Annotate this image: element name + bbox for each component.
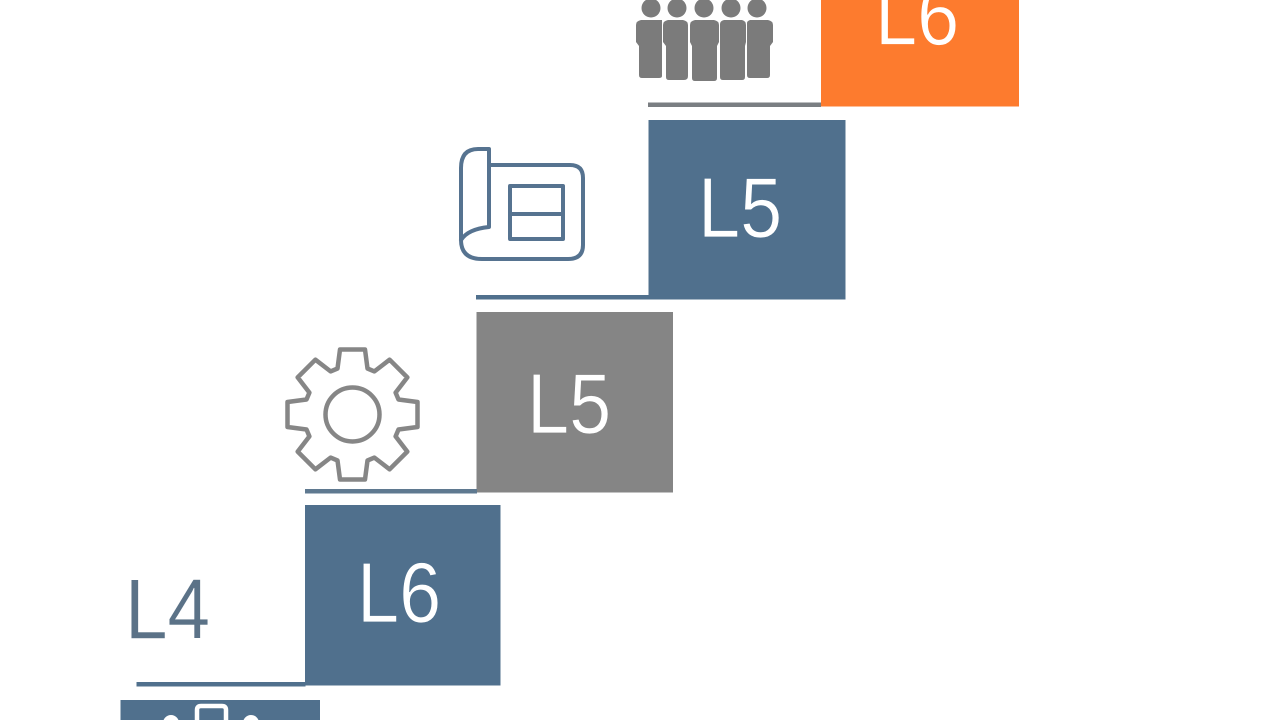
step: blue L6: L6 xyxy=(357,546,441,641)
step: blue L5: L5 xyxy=(698,161,782,256)
icon: gear xyxy=(288,350,418,480)
icon: blueprint xyxy=(461,149,583,259)
icon: partial white symbol xyxy=(163,706,259,720)
step: gray L5 xyxy=(476,312,673,492)
tread line: blue gray xyxy=(305,489,477,494)
step: blue L5 xyxy=(648,120,846,300)
tread line: blue xyxy=(476,295,649,300)
tread line: upper gray xyxy=(648,102,821,107)
step: bottom blue with partial icon xyxy=(120,700,320,720)
step: orange L6 xyxy=(821,0,1019,107)
tread line: lowest xyxy=(136,682,306,686)
step: blue L6 xyxy=(305,505,500,686)
step: gray L5: L5 xyxy=(527,357,611,452)
label: L4: L4 xyxy=(125,563,210,657)
icon: group of people xyxy=(636,0,773,81)
